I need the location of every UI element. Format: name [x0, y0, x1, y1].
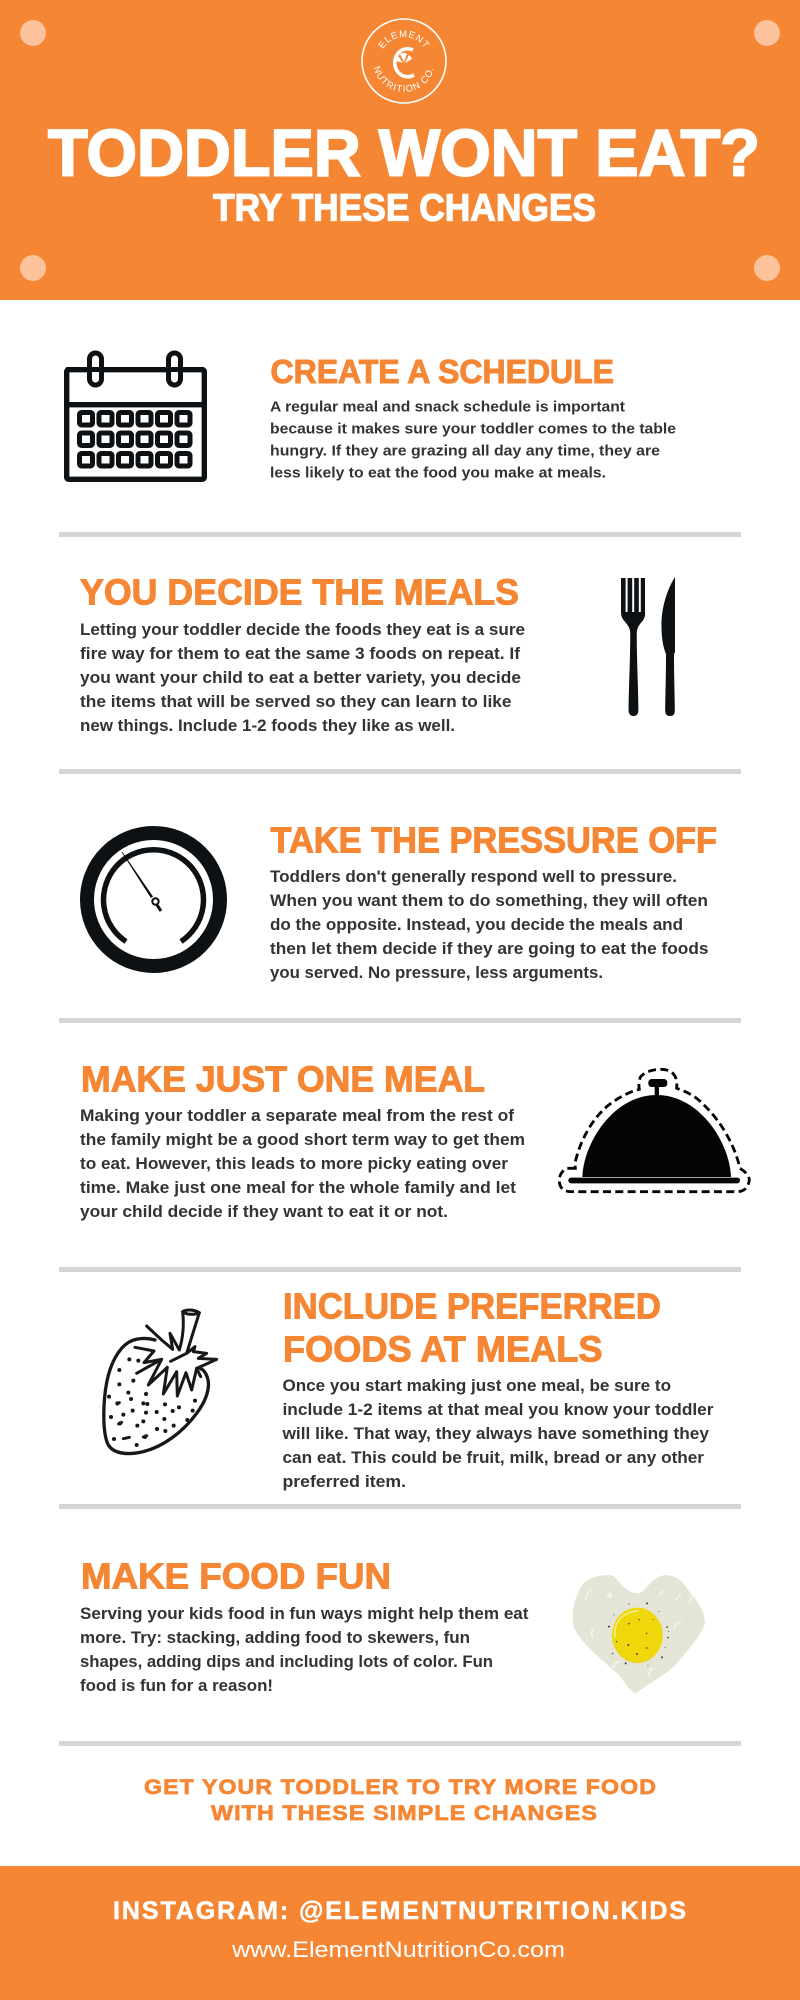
body text: shapes, adding dips and including lots of color. Fun [80, 1653, 493, 1671]
heading: MAKE FOOD FUN [81, 1556, 391, 1596]
body text: new things. Include 1-2 foods they like as well. [80, 717, 455, 735]
decorative corner dots [20, 20, 780, 281]
body text: Once you start making just one meal, be sure to [282, 1377, 671, 1395]
icon: serving cloche [559, 1069, 749, 1192]
heading [283, 1286, 661, 1370]
body text: preferred item. [282, 1473, 406, 1491]
footer banner [0, 1866, 800, 2000]
heading: INCLUDE PREFERRED [283, 1286, 661, 1326]
header banner [0, 0, 800, 300]
logo: Element Nutrition Co.: NUTRITION CO. [374, 66, 434, 92]
heading: TAKE THE PRESSURE OFF [270, 820, 717, 860]
body text [80, 621, 525, 735]
body text [270, 868, 708, 982]
subtitle: TRY THESE CHANGES [213, 188, 596, 230]
body text: fire way for them to eat the same 3 foods on repeat. If [80, 645, 521, 663]
body text [80, 1605, 529, 1695]
body text: more. Try: stacking, adding food to skewers, fun [80, 1629, 470, 1647]
body text: then let them decide if they are going to eat the foods [270, 940, 708, 958]
body text: to eat. However, this leads to more picky eating over [80, 1155, 509, 1173]
body text: will like. That way, they always have something they [281, 1425, 710, 1443]
body text: the family might be a good short term way to get them [80, 1131, 525, 1149]
icon: pressure gauge [87, 833, 220, 966]
body text: do the opposite. Instead, you decide the meals and [270, 916, 683, 934]
body text: your child decide if they want to eat it or not. [80, 1203, 448, 1221]
body text: Toddlers don't generally respond well to pressure. [270, 868, 677, 886]
heading: CREATE A SCHEDULE [270, 353, 614, 390]
title: TODDLER WONT EAT? [48, 116, 760, 190]
body text [80, 1107, 525, 1221]
icon: heart-shaped fried egg [573, 1575, 705, 1693]
body text: hungry. If they are grazing all day any time, they are [270, 444, 660, 460]
body text [281, 1377, 714, 1491]
body text: A regular meal and snack schedule is important [270, 400, 625, 416]
body text: Making your toddler a separate meal from the rest of [80, 1107, 515, 1125]
panel: include preferred foods [104, 1286, 714, 1491]
panel: you decide the meals [80, 572, 675, 735]
body text: When you want them to do something, they will often [270, 892, 708, 910]
icon: calendar [64, 353, 206, 479]
body text: food is fun for a reason! [80, 1677, 273, 1695]
body text: Serving your kids food in fun ways might help them eat [80, 1605, 529, 1623]
body text [270, 400, 676, 482]
body text: Letting your toddler decide the foods they eat is a sure [80, 621, 525, 639]
heading: MAKE JUST ONE MEAL [81, 1058, 485, 1100]
icon: strawberry [104, 1310, 217, 1454]
closing call to action: GET YOUR TODDLER TO TRY MORE FOOD [144, 1776, 657, 1799]
closing call to action [144, 1776, 657, 1825]
closing call to action: WITH THESE SIMPLE CHANGES [211, 1802, 598, 1825]
heading: YOU DECIDE THE MEALS [80, 572, 519, 612]
body text: you served. No pressure, less arguments. [270, 964, 603, 982]
panel: take the pressure off [87, 820, 717, 982]
panel: create a schedule [64, 353, 676, 482]
heading: FOODS AT MEALS [283, 1328, 602, 1370]
body text: the items that will be served so they can learn to like [80, 693, 512, 711]
panel: make just one meal [80, 1058, 749, 1221]
website: www.ElementNutritionCo.com [231, 1937, 565, 1962]
body text: include 1-2 items at that meal you know your toddler [282, 1401, 714, 1419]
body text: can eat. This could be fruit, milk, bread or any other [282, 1449, 705, 1467]
body text: less likely to eat the food you make at meals. [270, 466, 606, 482]
body text: time. Make just one meal for the whole family and let [80, 1179, 517, 1197]
instagram handle: INSTAGRAM: @ELEMENTNUTRITION.KIDS [113, 1897, 686, 1925]
logo: Element Nutrition Co. [361, 18, 447, 104]
body text: because it makes sure your toddler comes to the table [270, 422, 676, 438]
icon: fork and knife [621, 577, 675, 716]
body text: you want your child to eat a better variety, you decide [80, 669, 521, 687]
panel: make food fun [80, 1556, 705, 1695]
logo: Element Nutrition Co.: ELEMENT [378, 30, 430, 48]
